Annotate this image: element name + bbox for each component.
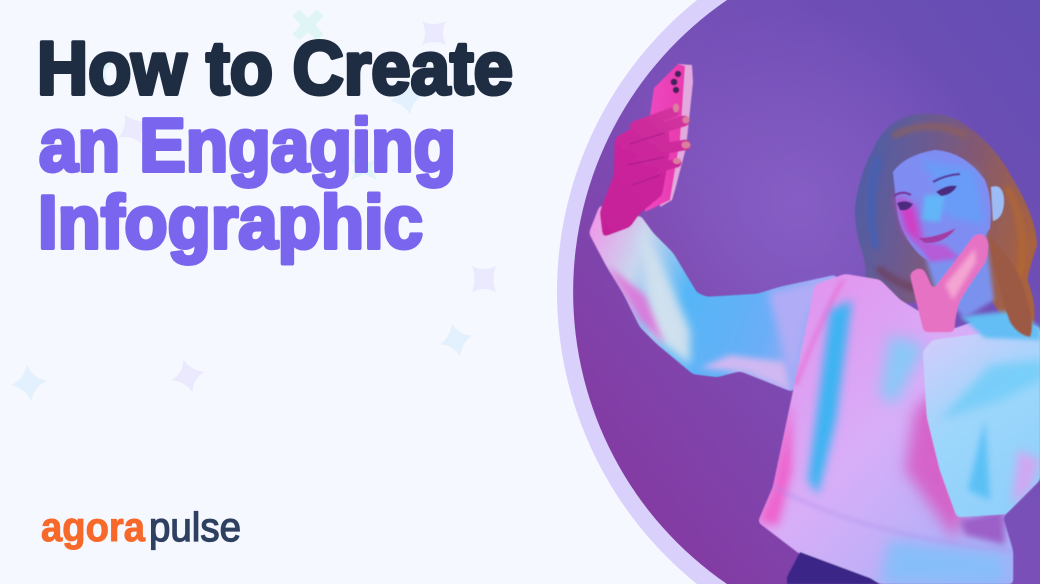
fingers [625,112,685,175]
phone edge [660,64,693,207]
hair strands [871,126,1022,290]
sweatshirt body [750,270,1040,584]
title line 3: Infographic [38,180,423,264]
mouth [918,228,956,243]
title line 2: an Engaging [39,103,456,187]
logo: agorapulse: pulse [149,504,241,550]
ear [991,186,1004,221]
title [37,26,513,264]
face [893,150,991,263]
phone back [645,64,685,212]
sweatshirt arm [589,206,836,392]
neck [925,230,994,318]
lilac ring around photo [557,0,1040,584]
logo: agorapulse [41,504,241,550]
hand highlight [945,248,976,300]
phone [645,64,693,212]
dark trousers [787,552,880,584]
selfie hand [600,104,690,237]
decorative stars behind title [11,11,496,401]
face colour washes [895,195,925,250]
hair tail over collar [988,235,1032,337]
hood collar [960,311,1040,340]
title line 1: How to Create [37,26,513,110]
hand on chin [910,234,988,332]
fingernails [673,104,690,164]
logo: agorapulse: agora [41,504,146,550]
photo circle [560,0,1040,584]
woman taking selfie [580,64,1040,584]
palm [600,118,670,237]
camera lenses [671,71,681,93]
hair [855,114,1037,337]
finger creases [628,133,664,185]
photo background [560,0,1040,584]
sweatshirt right arm [920,325,1040,520]
eyes and brows [894,174,960,210]
